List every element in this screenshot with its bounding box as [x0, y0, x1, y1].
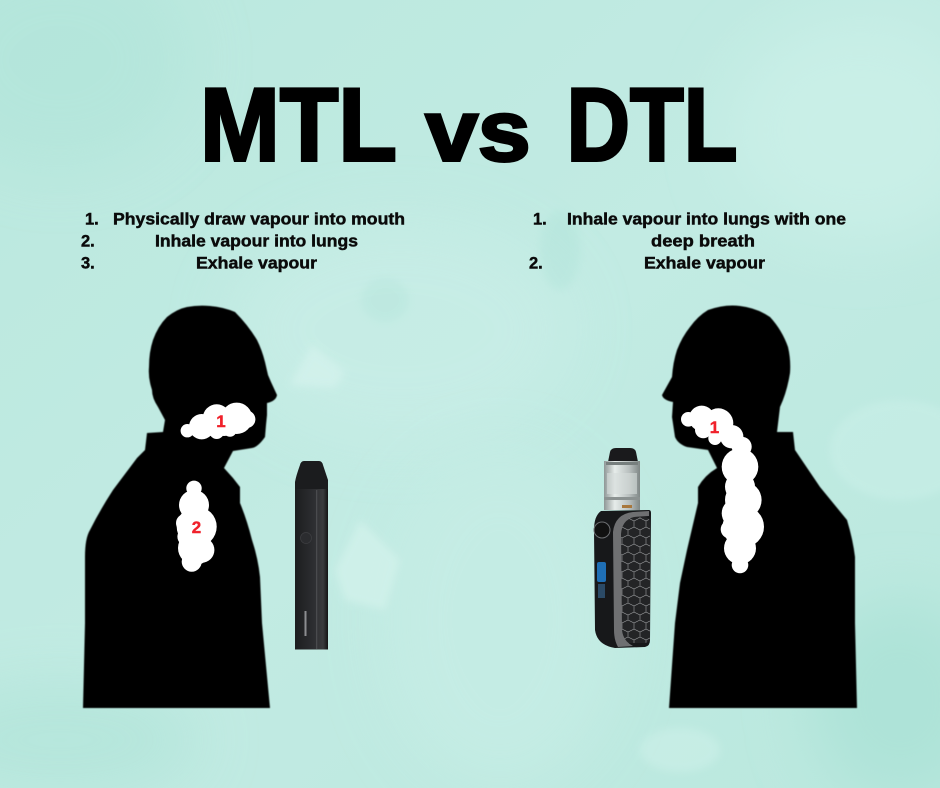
text block: DTL steps: 1. [533, 210, 547, 228]
cloud: mouth vapour [181, 403, 255, 439]
text block: DTL steps [529, 210, 846, 272]
icon: slim pod vape [295, 461, 328, 650]
panel: DTL figure [662, 306, 857, 708]
silhouette: MTL person facing right [83, 306, 277, 708]
cloud: throat-to-lung vapour [681, 406, 764, 573]
title [200, 68, 738, 184]
title: MTL [200, 68, 397, 184]
silhouette: DTL person facing left [662, 306, 857, 708]
panel: MTL figure [83, 306, 277, 708]
text block: MTL steps: 3. [81, 254, 95, 272]
text block: MTL steps: Inhale vapour into lungs [155, 232, 358, 250]
title: DTL [566, 68, 738, 184]
cloud: lung vapour [176, 481, 217, 572]
text block: MTL steps: Physically draw vapour into mouth [113, 210, 405, 228]
text block: MTL steps: Exhale vapour [196, 254, 318, 272]
icon: box mod vape with tank [594, 448, 651, 648]
step number 1: 1 [216, 412, 226, 431]
text block: MTL steps: 1. [85, 210, 99, 228]
text block: MTL steps [81, 210, 405, 272]
text block: DTL steps: deep breath [651, 232, 755, 250]
text block: DTL steps: 2. [529, 254, 543, 272]
step number 1: 1 [710, 418, 719, 437]
text block: DTL steps: Inhale vapour into lungs with one [567, 210, 846, 228]
step number 2: 2 [192, 518, 201, 537]
text block: MTL steps: 2. [81, 232, 95, 250]
text block: DTL steps: Exhale vapour [644, 254, 766, 272]
title: vs [426, 84, 530, 180]
